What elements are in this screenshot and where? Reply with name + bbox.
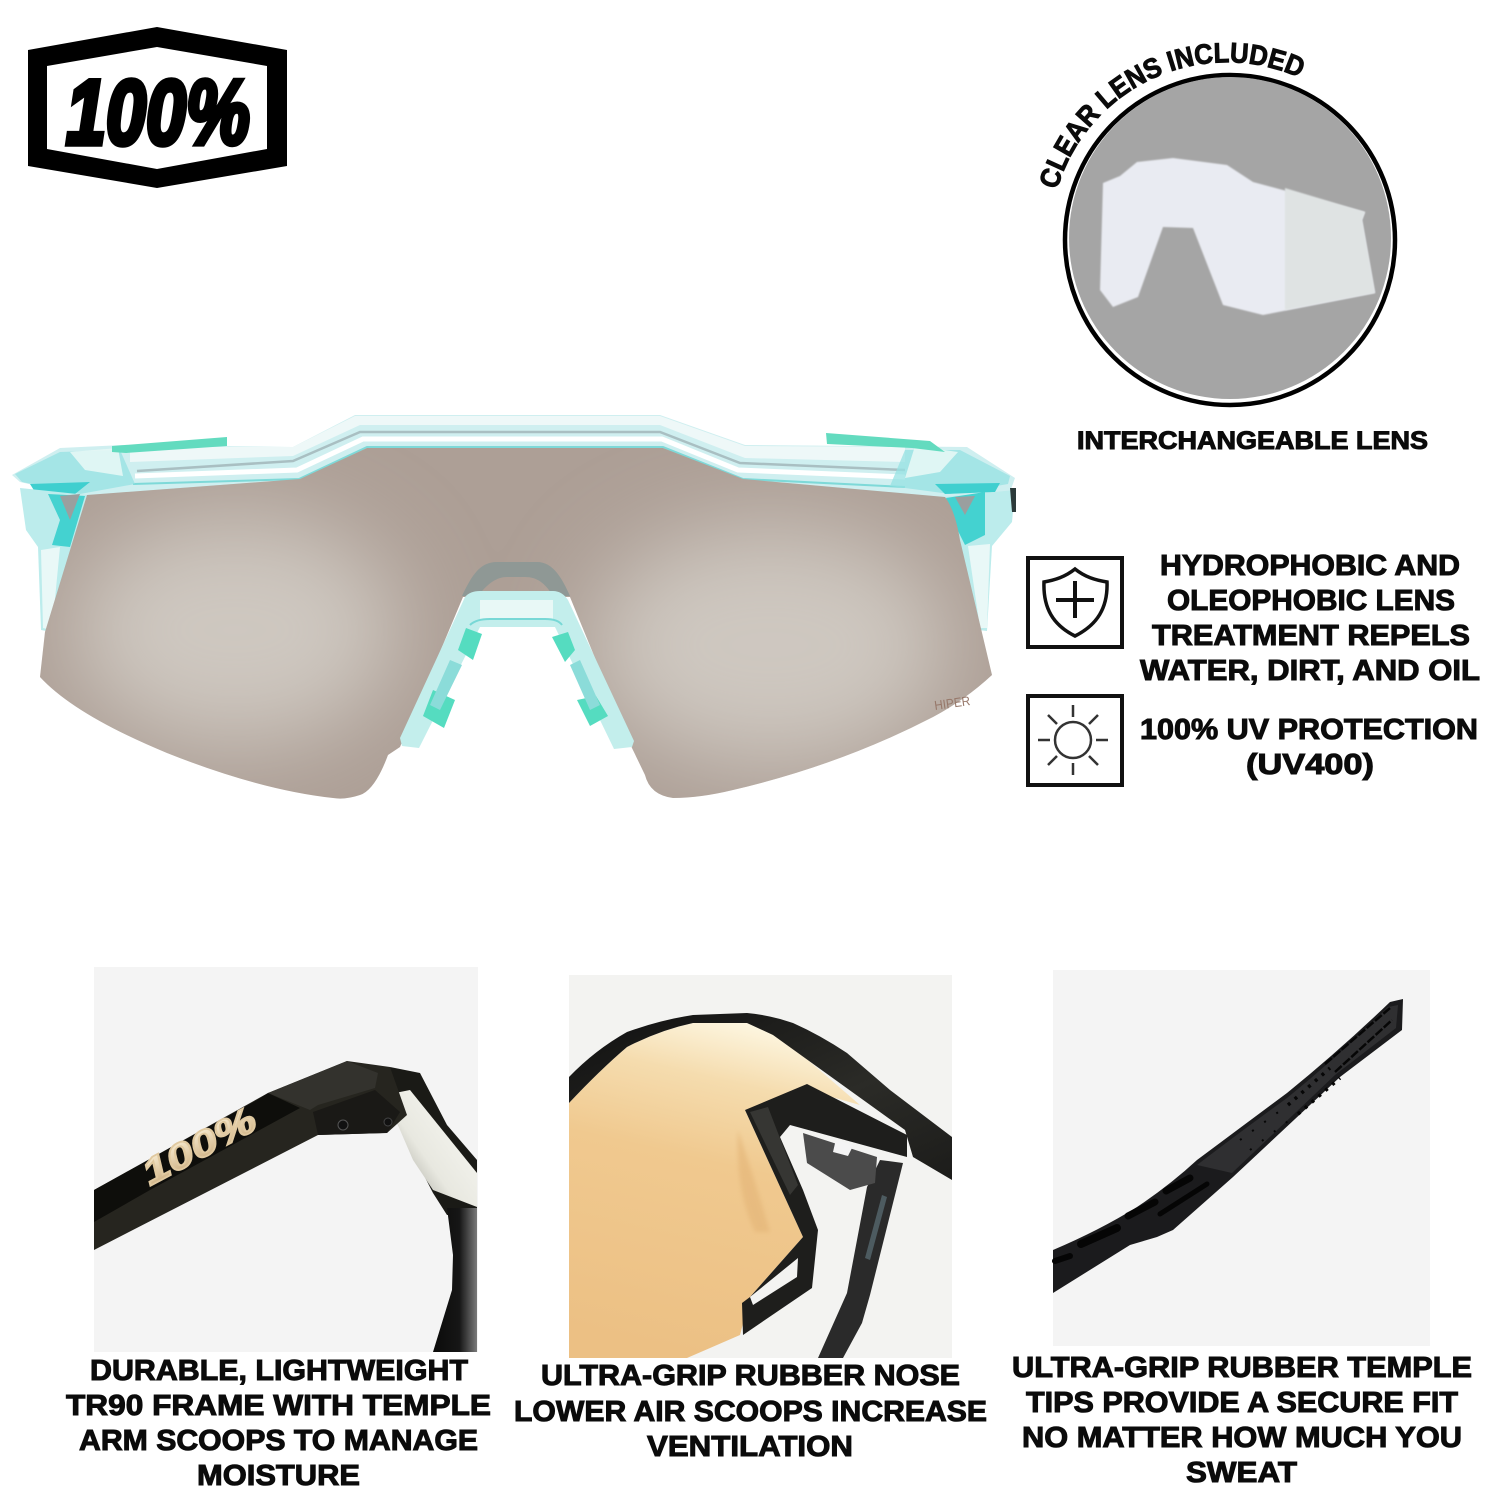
caption: temple tips: SWEAT bbox=[1186, 1457, 1297, 1489]
icon: shield with plus bbox=[1028, 558, 1122, 647]
text: hydrophobic treatment: OLEOPHOBIC LENS bbox=[1167, 585, 1455, 617]
main product photo: sunglasses bbox=[12, 415, 1016, 805]
lens nose shadow bbox=[462, 562, 570, 596]
caption: nose bbox=[514, 1360, 987, 1463]
rubber tip bbox=[1053, 999, 1403, 1293]
text: uv protection bbox=[1140, 714, 1478, 781]
logo: 100% badge bbox=[28, 27, 287, 188]
caption: temple tips: ULTRA-GRIP RUBBER TEMPLE bbox=[1012, 1352, 1472, 1384]
caption: frame: ARM SCOOPS TO MANAGE bbox=[79, 1425, 478, 1457]
logo: 100% badge: 100% bbox=[66, 62, 250, 164]
lens edge bbox=[390, 1067, 477, 1215]
caption: temple tips: NO MATTER HOW MUCH YOU bbox=[1022, 1422, 1462, 1454]
text: hydrophobic treatment: TREATMENT REPELS bbox=[1152, 620, 1470, 652]
panel: frame detail photo bbox=[94, 967, 478, 1352]
lens circle bbox=[1065, 75, 1395, 405]
text: hydrophobic treatment bbox=[1140, 550, 1480, 687]
caption: frame: DURABLE, LIGHTWEIGHT bbox=[90, 1355, 468, 1387]
temple bbox=[818, 1160, 903, 1358]
frame top band bbox=[12, 415, 1015, 499]
right hinge bbox=[945, 488, 1016, 631]
text: uv protection: (UV400) bbox=[1246, 749, 1374, 781]
panel: nose detail photo bbox=[569, 975, 952, 1358]
clear lens bbox=[1100, 158, 1375, 315]
caption: temple tips bbox=[1012, 1352, 1472, 1489]
caption: frame: MOISTURE bbox=[197, 1460, 360, 1492]
left hinge bbox=[20, 488, 87, 632]
text: hydrophobic treatment: WATER, DIRT, AND OIL bbox=[1140, 655, 1480, 687]
nose piece bbox=[400, 591, 634, 749]
text: uv protection: 100% UV PROTECTION bbox=[1140, 714, 1478, 746]
caption: interchangeable lens: INTERCHANGEABLE LENS bbox=[1077, 427, 1428, 455]
grip slots bbox=[1055, 1178, 1207, 1261]
lens mark: HIPER: HIPER bbox=[933, 693, 971, 713]
mirrored lens bbox=[30, 440, 1000, 805]
icon: sun bbox=[1028, 696, 1122, 785]
caption: temple tips: TIPS PROVIDE A SECURE FIT bbox=[1026, 1387, 1458, 1419]
text: hydrophobic treatment: HYDROPHOBIC AND bbox=[1160, 550, 1460, 582]
gold lens bbox=[569, 1023, 860, 1358]
caption: nose: LOWER AIR SCOOPS INCREASE bbox=[514, 1396, 987, 1428]
caption: frame: TR90 FRAME WITH TEMPLE bbox=[66, 1390, 491, 1422]
top frame bbox=[569, 1013, 952, 1180]
curved label: CLEAR LENS INCLUDED bbox=[1040, 42, 1304, 188]
teal rubber strips bbox=[112, 433, 945, 453]
temple logo: 100% bbox=[135, 1099, 263, 1193]
caption: nose: VENTILATION bbox=[647, 1431, 853, 1463]
caption: frame bbox=[66, 1355, 491, 1492]
rubber nose pad bbox=[803, 1133, 877, 1190]
nose bracket bbox=[742, 1084, 907, 1335]
caption: nose: ULTRA-GRIP RUBBER NOSE bbox=[541, 1360, 960, 1392]
temple arm bbox=[94, 1061, 407, 1250]
grip dots bbox=[1240, 1008, 1392, 1150]
panel: temple tip photo bbox=[1053, 970, 1430, 1346]
panel: clear lens included bbox=[1040, 42, 1398, 408]
